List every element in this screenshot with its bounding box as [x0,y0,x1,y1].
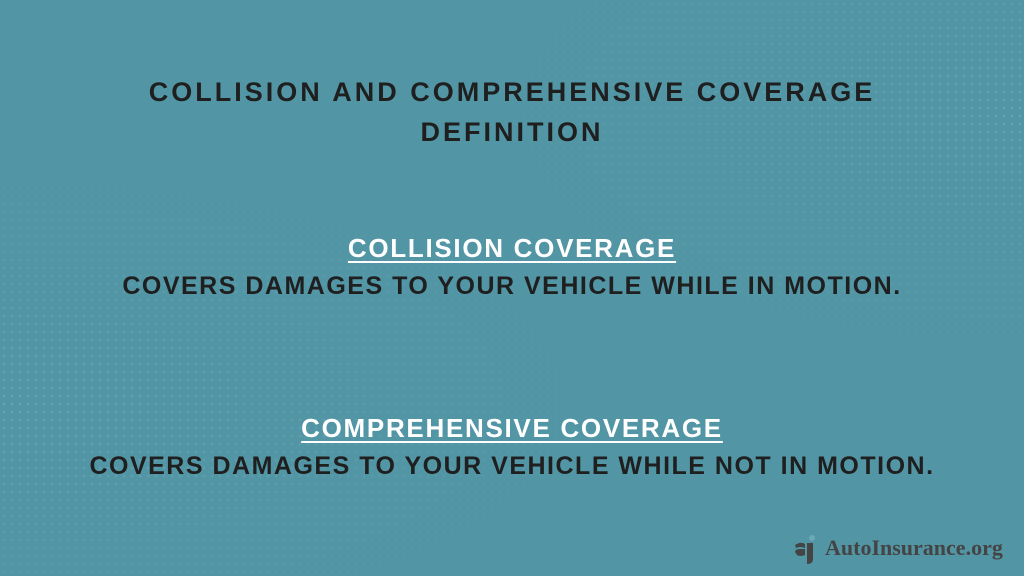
icon: logo mark [795,535,815,564]
title: DEFINITION [420,117,604,147]
logo [795,535,1003,564]
logo text: AutoInsurance.org [825,535,1003,560]
title: COLLISION AND COMPREHENSIVE COVERAGE [149,77,875,107]
text: comprehensive definition: COVERS DAMAGES TO YOUR VEHICLE WHILE NOT IN MOTION. [89,452,935,480]
heading: collision coverage: COLLISION COVERAGE [348,233,676,263]
text: collision definition: COVERS DAMAGES TO YOUR VEHICLE WHILE IN MOTION. [122,272,902,300]
heading: comprehensive coverage: COMPREHENSIVE COVERAGE [301,413,723,443]
title [149,77,875,147]
